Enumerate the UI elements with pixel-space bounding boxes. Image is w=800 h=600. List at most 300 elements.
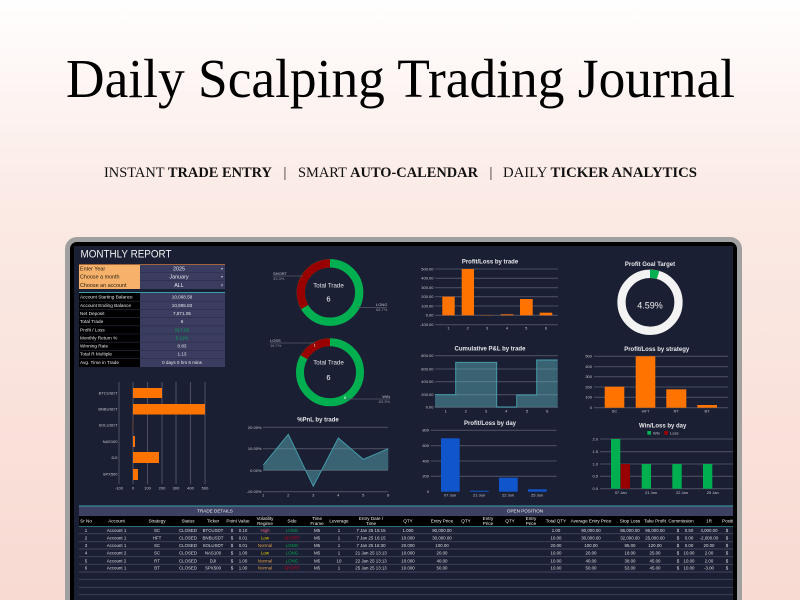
chart: win loss donut: 1 [314,342,317,348]
panel: report selectors: ▾ [221,282,223,288]
chart: profit loss by day: 600 [422,443,430,448]
chart: profit loss by day: 800 [422,428,430,433]
chart: profit by ticker: 500 [202,486,209,490]
chart: profit loss by strategy: 200 [585,384,593,389]
chart: profit loss by strategy: 400 [585,364,593,369]
panel: account statistics: 10,068.58 [172,295,193,300]
chart: profit loss by strategy: 0 [590,405,593,410]
table row 1: M5 [314,528,321,533]
table row 5: 10.00 [550,558,562,563]
table row 6: 6 [85,566,88,571]
table header row: QTY [403,519,413,524]
table row 5: DJI [210,558,216,563]
subtitle: INSTANT TRADE ENTRY [104,165,273,181]
dashboard screen [79,249,739,595]
table row 3: $ [726,543,729,548]
table row 2: 32,000.00 [620,536,640,541]
table row 5: 5 [85,558,88,563]
chart: long short donut: 33.3% [273,276,285,281]
chart: win loss donut: 16.7% [270,343,282,348]
table header row: Strategy [148,519,166,524]
chart: cumulative pnl by trade: 4 [505,408,508,414]
table row 1: High [260,528,270,533]
table row 3: 0.00 [685,543,694,548]
chart: profit loss by day: 07 Jan [444,492,456,498]
panel: report selectors: ▾ [221,274,223,279]
table row 5: CLOSED [179,558,197,563]
table header row: Average Entry Price [571,519,612,524]
table row 6: SHORT [284,566,300,571]
table row 2: -2,000.00 [700,536,719,541]
table row 4: 21 Jan 25 13:13 [355,551,387,556]
table: trade log: OPEN POSITION [507,508,543,514]
table row 3: 100.00 [584,543,598,548]
table row 1 [85,528,728,533]
chart: cumulative pnl by trade: 0.00 [426,405,434,410]
chart: win loss by day: 07 Jan [615,490,627,495]
table header row: Side [287,519,297,524]
table row 3: 1 [338,543,341,548]
chart: cumulative pnl by trade: 1 [445,408,448,414]
chart: win loss by day: 2.0 [592,436,599,441]
table: trade log [79,506,739,595]
table header row: Regime [257,521,273,526]
table row 2: 10.00 [550,536,562,541]
table row 4: NAS100 [205,551,222,556]
chart: profit loss by day [422,421,557,498]
table row 4: 4 [85,551,88,556]
table row 2: 0.01 [239,536,248,541]
table row 4: Account 2 [107,551,127,556]
table row 1: 1.00 [552,528,561,533]
table header row: Price [483,521,494,526]
chart: profit by ticker: BTCUSDT [99,390,118,396]
table row 4: 10.00 [550,551,562,556]
table row 5: Normal [258,558,272,563]
chart: long short donut: 6 [326,294,331,304]
panel: account statistics: 917.25 [175,327,189,332]
subtitle: | [284,165,286,181]
table row 6: M5 [314,566,321,571]
chart: percent pnl by trade [247,418,390,498]
panel: account statistics: Profit / Loss [80,327,105,332]
panel: account statistics: 0 days 0 hrs 6 mins [162,360,203,365]
table header row: Stop Loss [620,519,641,524]
chart: profit loss by trade: 0.00 [426,313,434,318]
table row 3: $ [677,543,680,548]
panel: report selectors: ALL [174,283,184,289]
panel: report selectors [79,264,225,289]
table row 4: $ [726,551,729,556]
chart: profit by ticker: NAS100 [103,439,118,444]
panel: report selectors: Enter Year [80,266,105,272]
table row 5: M5 [314,558,321,563]
chart: cumulative pnl by trade: 800.00 [421,353,434,358]
table row 1: $ [231,528,234,533]
chart: profit loss by trade: 2 [467,326,470,330]
table row 5: 2.00 [705,558,714,563]
chart: profit loss by trade: 500.00 [421,266,434,271]
table row 6: -3.00 [704,566,715,571]
table row 1: 95,000.00 [645,528,665,533]
table row 4: 10.00 [684,551,695,556]
panel: account statistics: 0.83 [178,343,187,348]
table row 6: 10.00 [684,566,695,571]
table row 3: SC [154,543,160,548]
table row 4: 18.00 [624,551,636,556]
table row 5: $ [726,558,729,563]
table header row: Frame [310,521,324,526]
table row 2: Account 1 [107,536,127,541]
table row 2: 1 [338,536,341,541]
table row 1: $ [726,528,729,533]
chart: cumulative pnl by trade: 400.00 [421,379,434,384]
table row 2: 0.00 [685,536,694,541]
chart: profit goal target donut [622,262,678,331]
table header row: Take Profit [644,519,667,524]
table row 4: 20.00 [436,551,448,556]
table row 3: 3 [85,543,88,548]
chart: win loss by day: 0.5 [592,474,599,479]
chart: cumulative pnl by trade: 6 [546,408,549,414]
table header row: Total QTY [546,519,566,524]
chart: profit loss by trade: 5 [525,326,528,330]
table row 2: 30,000.00 [581,536,601,541]
table row 5: 45.00 [650,558,661,563]
table row 1: 1 [85,528,88,533]
laptop frame [65,237,742,600]
chart: win loss by day: 1.5 [592,449,599,454]
chart: profit loss by day: 22 Jan [502,492,514,498]
panel: account statistics: Net Deposit [80,311,105,316]
chart: cumulative pnl by trade [421,347,558,414]
table row 6: $ [231,566,234,571]
table row 2: HFT [153,536,162,541]
table row 3: LONG [286,543,299,548]
chart: profit loss by day: 25 Jan [531,492,543,498]
table header row: 1R [706,519,713,524]
chart: long short donut [273,263,388,322]
table row 2: 7 Jan 25 16:15 [356,536,386,541]
table row 1: LONG [286,528,299,533]
table row 1: SC [154,528,160,533]
table row 1: $ [677,528,680,533]
chart: profit loss by day: 0 [427,489,430,494]
chart: win loss by day: 22 Jan [676,490,688,495]
table header row: Entry [483,516,494,521]
table row 4: 2.00 [705,551,714,556]
subtitle: SMART AUTO-CALENDAR [298,165,479,181]
table row 6: SPX500 [205,566,222,571]
chart: win loss donut: 6 [326,373,331,382]
chart: cumulative pnl by trade: 3 [485,408,488,414]
chart: win loss by day: 0.0 [592,486,599,491]
table row 6: $ [677,566,680,571]
table row 2: Low [261,536,270,541]
chart: win loss donut: LOSS [270,338,281,343]
table row 1: 1 [338,528,341,533]
table row 5: 40.00 [436,558,448,563]
table row 3: Account 1 [107,543,127,548]
table row 5: Account 2 [107,558,127,563]
table header row: Commission [668,519,694,524]
table row 6: 10.000 [401,566,415,571]
chart: profit loss by strategy: HFT [642,408,650,414]
table row 5: $ [231,558,234,563]
chart: profit loss by trade: -100.00 [420,322,434,327]
chart: profit loss by strategy: BT [704,408,710,414]
chart: profit by ticker: SOLUSDT [99,422,118,428]
table row 4: SC [154,551,160,556]
table header row: Position [722,519,739,524]
table header row: QTY [505,519,515,524]
panel: account statistics: Account Ending Balance [80,303,131,308]
chart: profit by ticker: SPX500 [103,472,118,476]
table row 5: 10.000 [401,558,415,563]
chart: win loss by day: 21 Jan [645,490,657,495]
chart: profit goal target donut: 4.59% [637,300,663,310]
chart: profit loss by strategy: 100 [585,395,593,400]
table header row: Time [312,516,322,521]
table row 2: 10.000 [401,536,415,541]
table header row: Volatility [257,516,274,521]
panel: report selectors: 2025 [173,266,185,272]
table row 2: SHORT [284,536,300,541]
table header row: Ticker [207,519,220,524]
table row 6: 1.00 [239,566,248,571]
table header row: Entry Date / [359,516,384,521]
table row 1: 4,000.00 [700,528,718,533]
table row 4: Low [261,551,270,556]
chart: profit loss by trade: 100.00 [421,303,434,308]
panel: account statistics: Total Trade [80,319,104,324]
chart: percent pnl by trade: 6 [387,492,390,498]
table header row: Time [366,521,376,526]
chart: percent pnl by trade: 20.00% [248,425,262,430]
table row 6: 50.00 [586,566,597,571]
chart: percent pnl by trade: 1 [262,492,265,498]
table row 4: LONG [286,551,299,556]
table row 2 [85,536,728,540]
table row 1: BTCUSDT [203,528,224,533]
table: trade log: TRADE DETAILS [197,508,233,514]
panel: account statistics: 7,871.05 [173,311,191,316]
table row 6: 53.00 [624,566,636,571]
chart: percent pnl by trade: 10.00% [248,446,262,451]
table row 1: 7 Jan 25 15:15 [356,528,386,533]
chart: cumulative pnl by trade: 2 [465,408,468,414]
chart: win loss donut: WIN [382,394,390,399]
table row 3: M5 [314,543,321,548]
table row 4: 25.00 [650,551,661,556]
table row 4: $ [231,551,234,556]
chart: profit loss by day: 200 [422,474,430,479]
table row 3 [84,544,728,548]
table row 4 [84,551,728,555]
subtitle: | [490,165,492,181]
chart: win loss by day: Win/Loss by day [639,424,687,430]
table header row: Leverage [329,519,349,524]
table header row [80,516,739,526]
panel: report selectors: Choose an account [80,283,127,289]
table row 3: 85.00 [624,543,636,548]
table row 2: $ [726,536,729,541]
panel: account statistics [79,292,225,367]
chart: profit by ticker: 400 [187,486,195,490]
chart: win loss by day: 1.0 [592,461,599,466]
table row 5: 22 Jan 25 13:13 [355,558,387,563]
chart: percent pnl by trade: 0.00% [250,468,262,473]
table row 2: CLOSED [179,536,197,541]
panel: report selectors: ▾ [221,266,223,271]
table row 6: BT [154,566,160,571]
table row 3: SOLUSDT [203,543,224,548]
table row 3: $ [231,543,234,548]
table row 4: 1.00 [239,551,248,556]
chart: percent pnl by trade: 3 [312,492,315,498]
table row 5: LONG [286,558,299,563]
chart: profit loss by trade: 1 [447,326,450,330]
table row 5: 10 [337,558,342,563]
chart: win loss by day: Loss [670,430,678,435]
chart: profit loss by trade [420,259,558,330]
table row 2: BNBUSDT [203,536,224,541]
chart: profit loss by strategy: 500 [585,354,593,359]
table row 1: 90,000.00 [581,528,601,533]
table row 6 [85,566,728,570]
chart: percent pnl by trade: 4 [337,492,340,498]
table row 6: 10.00 [550,566,562,571]
table row 5: 40.00 [586,558,597,563]
table row 5: 1.00 [239,558,248,563]
chart: profit loss by trade: 200.00 [421,294,434,299]
table header row: Entry Price [431,519,454,524]
chart: profit loss by strategy: Profit/Loss by strategy [624,347,690,353]
table row 6: Account 1 [107,566,127,571]
chart: win loss by day: Win [653,430,660,435]
chart: profit loss by strategy [585,347,728,414]
table row 1: 1.000 [402,528,414,533]
table header row: Sr No [80,519,92,524]
chart: long short donut: LONG [376,302,387,307]
chart: profit loss by trade: 6 [545,326,548,330]
table row 1: 90,000.00 [432,528,452,533]
chart: long short donut: SHORT [273,271,287,276]
chart: profit loss by day: Profit/Loss by day [464,421,517,427]
panel: account statistics: 10,985.83 [172,303,193,308]
chart: cumulative pnl by trade: Cumulative P&L by trade [455,347,526,353]
table row 3: 20.00 [704,543,715,548]
chart: profit goal target donut: Profit Goal Target [625,262,675,268]
table row 6: 1 [338,566,341,571]
panel: account statistics: Avg. Time in Trade [80,360,119,365]
panel: account statistics: Monthly Return % [80,335,117,340]
chart: percent pnl by trade: 5 [362,492,365,498]
subtitle: DAILY TICKER ANALYTICS [503,165,697,181]
panel: account statistics: 6 [181,319,184,324]
table row 6: 45.00 [650,566,661,571]
table header row: Status [181,519,195,524]
panel: account statistics: Account Starting Balance [80,295,133,300]
panel: account statistics: 1.13 [178,352,187,357]
table row 3: 7 Jan 25 16:30 [356,543,386,548]
table row 4: 1 [338,551,341,556]
chart: profit loss by day: 21 Jan [473,492,485,498]
table header row: Point Value [226,519,250,524]
subtitle [104,165,697,181]
panel: account statistics: Total R Multiple [80,352,112,357]
table row 2: 25,000.00 [645,536,665,541]
table row 1: 0.10 [239,528,248,533]
chart: profit loss by strategy: SC [612,408,617,414]
chart: profit loss by strategy: RT [674,408,679,414]
heading: monthly report: MONTHLY REPORT [80,249,172,261]
chart: win loss donut: 83.3% [379,399,390,404]
table row 6: Normal [258,566,272,571]
table row 3: 20.00 [550,543,562,548]
table header row: Account [108,519,126,524]
table row 6: 25 Jan 25 13:13 [355,566,387,571]
panel: account statistics: Winning Rate [80,343,109,348]
table row 4: $ [677,551,680,556]
chart: percent pnl by trade: 2 [287,492,290,498]
table row 3: 20.000 [401,543,415,548]
chart: profit loss by trade: 400.00 [421,276,434,281]
table row 1: CLOSED [179,528,197,533]
chart: profit loss by day: 400 [422,458,430,463]
table row 2: $ [677,536,680,541]
chart: profit loss by trade: 3 [486,326,489,330]
table header row: Entry [526,516,537,521]
table row 4: 10.000 [401,551,415,556]
table row 1: 86,000.00 [620,528,640,533]
table row 2: 2 [85,536,88,541]
chart: percent pnl by trade: -10.00% [247,489,262,494]
table row 5: $ [677,558,680,563]
table row 4: M5 [314,551,321,556]
table row 4: CLOSED [179,551,197,556]
table row 2: $ [231,536,234,541]
chart: profit by ticker: 100 [144,486,152,490]
table row 5 [85,559,728,563]
chart: win loss by day [592,424,733,495]
chart: profit by ticker: 200 [159,486,166,490]
table row 3: 0.01 [239,543,248,548]
table row 3: Normal [258,543,272,548]
chart: profit by ticker: 300 [173,486,180,490]
table row 1: Account 1 [107,528,127,533]
chart: profit loss by strategy: 300 [585,374,593,379]
chart: profit loss by trade: Profit/Loss by trade [462,259,519,265]
chart: profit loss by trade: 4 [506,326,509,330]
title: Daily Scalping Trading Journal [66,48,735,109]
table row 3: CLOSED [179,543,197,548]
table row 3: 120.00 [648,543,662,548]
table row 2: 30,000.00 [432,536,452,541]
chart: win loss donut: 5 [344,395,347,400]
chart: long short donut: 66.7% [376,307,388,312]
chart: cumulative pnl by trade: 5 [526,408,529,414]
chart: profit by ticker [98,382,209,490]
table header row: Price [526,521,537,526]
table header row: QTY [461,519,471,524]
table row 5: RT [154,558,160,563]
table row 5: 38.00 [624,558,636,563]
panel: account statistics: 9.11% [176,335,188,340]
table row 2: M5 [314,536,321,541]
chart: profit by ticker: DJI [112,455,118,460]
chart: profit loss by trade: 300.00 [421,285,434,290]
